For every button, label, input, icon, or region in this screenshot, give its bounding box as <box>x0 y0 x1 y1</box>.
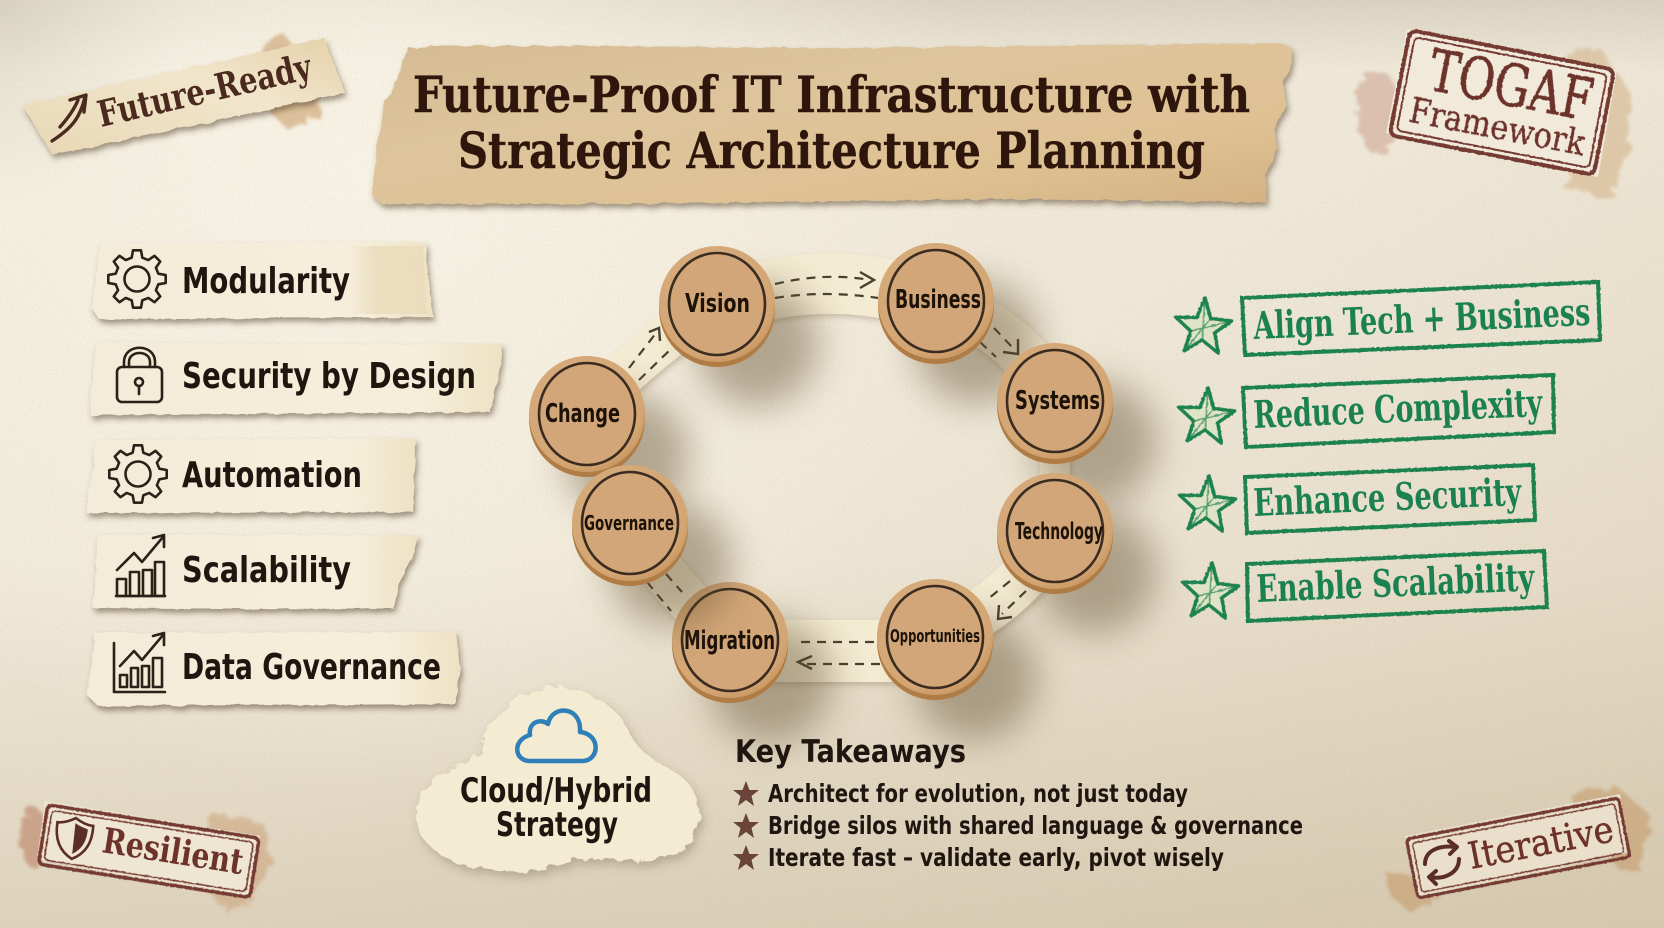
benefit: Enhance Security <box>1177 465 1535 533</box>
strip: Data Governance <box>87 632 460 706</box>
label: Future-Ready: Future-Ready <box>94 46 316 136</box>
node: Governance: Governance <box>584 511 674 535</box>
icon: green star <box>1180 561 1240 619</box>
label: TOGAF: TOGAF <box>1423 36 1598 134</box>
node: Change: Change <box>545 399 620 429</box>
label: Cloud/Hybrid Strategy: Cloud/Hybrid <box>460 771 652 811</box>
icon: green star <box>1177 474 1237 532</box>
diagram: architecture cycle <box>529 243 1157 743</box>
icon: blue cloud <box>517 711 596 761</box>
node: Change <box>529 356 689 517</box>
icon: green star <box>1176 386 1236 444</box>
strip: Security by Design <box>90 342 503 415</box>
title banner <box>372 43 1292 204</box>
label: Cloud/Hybrid Strategy: Strategy <box>496 805 618 845</box>
strip: Scalability <box>93 535 418 609</box>
stamp: Iterative <box>1385 785 1650 910</box>
arrows: dashed flow <box>629 272 1026 669</box>
node: Vision <box>659 246 819 407</box>
label: Framework: Framework <box>1406 91 1589 164</box>
icon: shield <box>54 816 94 861</box>
ribbon track <box>587 284 1055 651</box>
icon: gear <box>108 250 166 308</box>
label: Data Governance: Data Governance <box>182 647 441 688</box>
bullet 1: Architect for evolution, not just today <box>768 779 1188 808</box>
label: Automation: Automation <box>182 455 362 496</box>
node: Vision: Vision <box>685 289 750 319</box>
node: Opportunities <box>877 579 1037 740</box>
icon: cycle arrows <box>1425 841 1459 884</box>
label: Modularity: Modularity <box>182 261 350 302</box>
benefit: Enable Scalability: Enable Scalability <box>1255 554 1536 611</box>
node: Governance <box>572 465 732 626</box>
stamp: TOGAF Framework <box>1356 29 1632 200</box>
icon: green star <box>1173 296 1233 354</box>
heading: Key Takeaways <box>735 734 966 770</box>
cloud card: Cloud/Hybrid Strategy <box>414 688 700 871</box>
icon: data chart <box>114 633 165 692</box>
tag: Future-Ready <box>22 32 345 155</box>
strip: Automation <box>86 438 416 513</box>
benefit: Reduce Complexity: Reduce Complexity <box>1252 380 1544 437</box>
panel: green stamped benefits <box>1173 282 1600 621</box>
node: Migration <box>672 582 832 743</box>
strip: Modularity <box>92 242 433 319</box>
node: Systems: Systems <box>1015 386 1100 416</box>
title text: Strategic Architecture Planning <box>458 121 1205 180</box>
icon: padlock <box>117 348 162 402</box>
benefit: Enable Scalability <box>1180 551 1547 621</box>
label: Resilient: Resilient <box>100 820 246 883</box>
label: Security by Design: Security by Design <box>182 356 476 397</box>
node: Migration: Migration <box>684 626 775 656</box>
benefit: Enhance Security: Enhance Security <box>1252 469 1523 525</box>
panel: key takeaways <box>733 734 1303 872</box>
label: Iterative: Iterative <box>1465 808 1617 878</box>
title text: Future-Proof IT Infrastructure with <box>413 65 1250 124</box>
bullet 2: Bridge silos with shared language & governance <box>768 811 1303 840</box>
node: Opportunities: Opportunities <box>890 626 980 647</box>
node: Business <box>878 243 1038 404</box>
node: Technology: Technology <box>1015 519 1103 545</box>
benefit: Reduce Complexity <box>1176 375 1554 447</box>
label: Cloud/Hybrid Strategy <box>460 771 652 845</box>
benefit: Align Tech + Business <box>1173 282 1600 355</box>
title text <box>413 65 1250 180</box>
panel: principles list <box>86 242 503 706</box>
stamp: Resilient <box>20 801 272 912</box>
node: Business: Business <box>895 285 981 315</box>
icon: gear <box>109 445 167 503</box>
node: Systems <box>997 343 1157 504</box>
icon: rising arrow <box>52 95 86 141</box>
label: Scalability: Scalability <box>182 550 351 591</box>
icon: growth chart <box>116 535 165 596</box>
bullet 3: Iterate fast – validate early, pivot wisely <box>768 843 1224 872</box>
node: Technology <box>997 473 1157 634</box>
